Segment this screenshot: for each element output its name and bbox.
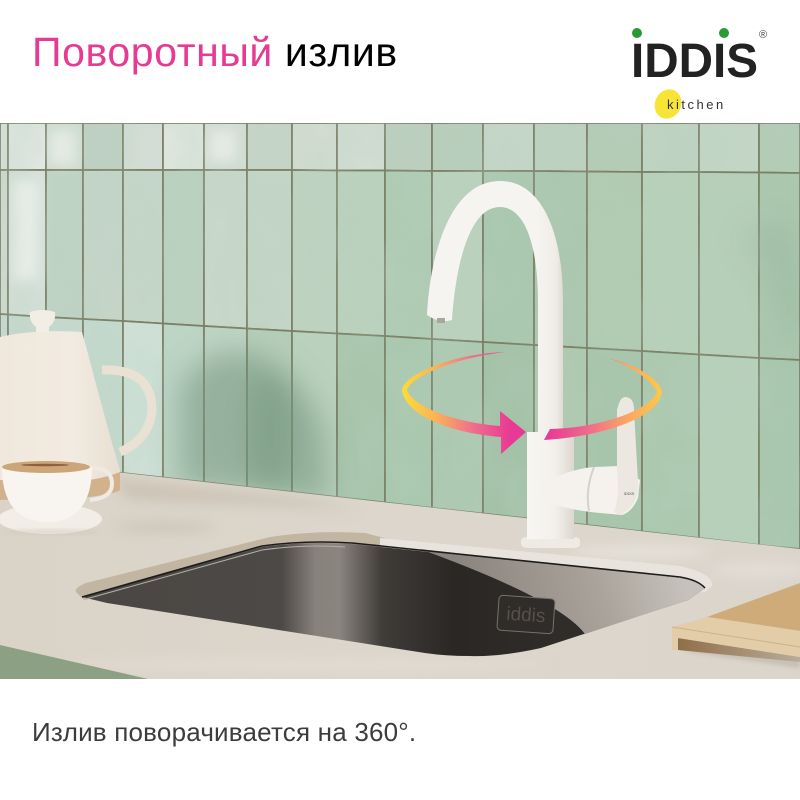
basin top lip bbox=[82, 542, 705, 597]
front left arrow bbox=[402, 390, 526, 454]
caption: Излив поворачивается на 360°. bbox=[32, 717, 416, 747]
flange bbox=[521, 537, 580, 548]
kettle body bbox=[0, 331, 120, 480]
cup handle bbox=[90, 468, 112, 500]
basin lit wall bbox=[420, 549, 705, 634]
mixer body bbox=[559, 466, 640, 515]
kettle base bbox=[0, 470, 120, 500]
glossy reflection bbox=[14, 130, 236, 280]
yellow blob bbox=[650, 85, 686, 123]
tile wall bbox=[0, 123, 800, 553]
front right arrow bbox=[544, 392, 662, 440]
lever bbox=[614, 397, 638, 515]
board underside bbox=[678, 638, 800, 662]
board rim bbox=[672, 617, 800, 657]
board shadow bbox=[686, 651, 800, 668]
photo: kitchen scene bbox=[0, 123, 800, 679]
rotation arrow bbox=[402, 352, 662, 454]
sink logo plate: iddis bbox=[506, 604, 546, 627]
kettle bbox=[0, 310, 152, 500]
countertop bbox=[0, 459, 800, 679]
coffee bbox=[2, 461, 90, 473]
saucer bbox=[0, 504, 102, 534]
back left arc bbox=[402, 352, 505, 390]
coffee cup bbox=[0, 461, 112, 535]
back right arc bbox=[608, 358, 662, 392]
title: Поворотный излив bbox=[32, 29, 398, 75]
counter shading bbox=[120, 478, 686, 556]
spout bbox=[427, 181, 563, 436]
faucet bbox=[427, 181, 640, 548]
logo dots bbox=[632, 28, 729, 38]
brand on lever: IDDIS bbox=[624, 491, 635, 496]
wall shadow patches bbox=[180, 225, 800, 500]
registered mark: ® bbox=[759, 29, 767, 41]
tile mottling bbox=[0, 123, 800, 553]
cup bbox=[2, 467, 92, 522]
logo: iddis kitchen bbox=[631, 28, 767, 123]
sink bbox=[76, 532, 712, 656]
kettle lid knob bbox=[30, 310, 55, 332]
kettle handle bbox=[102, 370, 152, 452]
sink logo plate bbox=[497, 595, 555, 634]
nozzle bbox=[437, 318, 445, 323]
cabinet front bbox=[0, 645, 148, 679]
kitchen label: kitchen bbox=[667, 97, 726, 112]
board inner tray bbox=[707, 583, 800, 631]
logo wordmark: IDDIS bbox=[631, 35, 758, 88]
wooden board bbox=[672, 583, 800, 668]
sink basin bbox=[82, 543, 705, 656]
sink rim bbox=[76, 532, 392, 600]
column bbox=[527, 432, 574, 539]
